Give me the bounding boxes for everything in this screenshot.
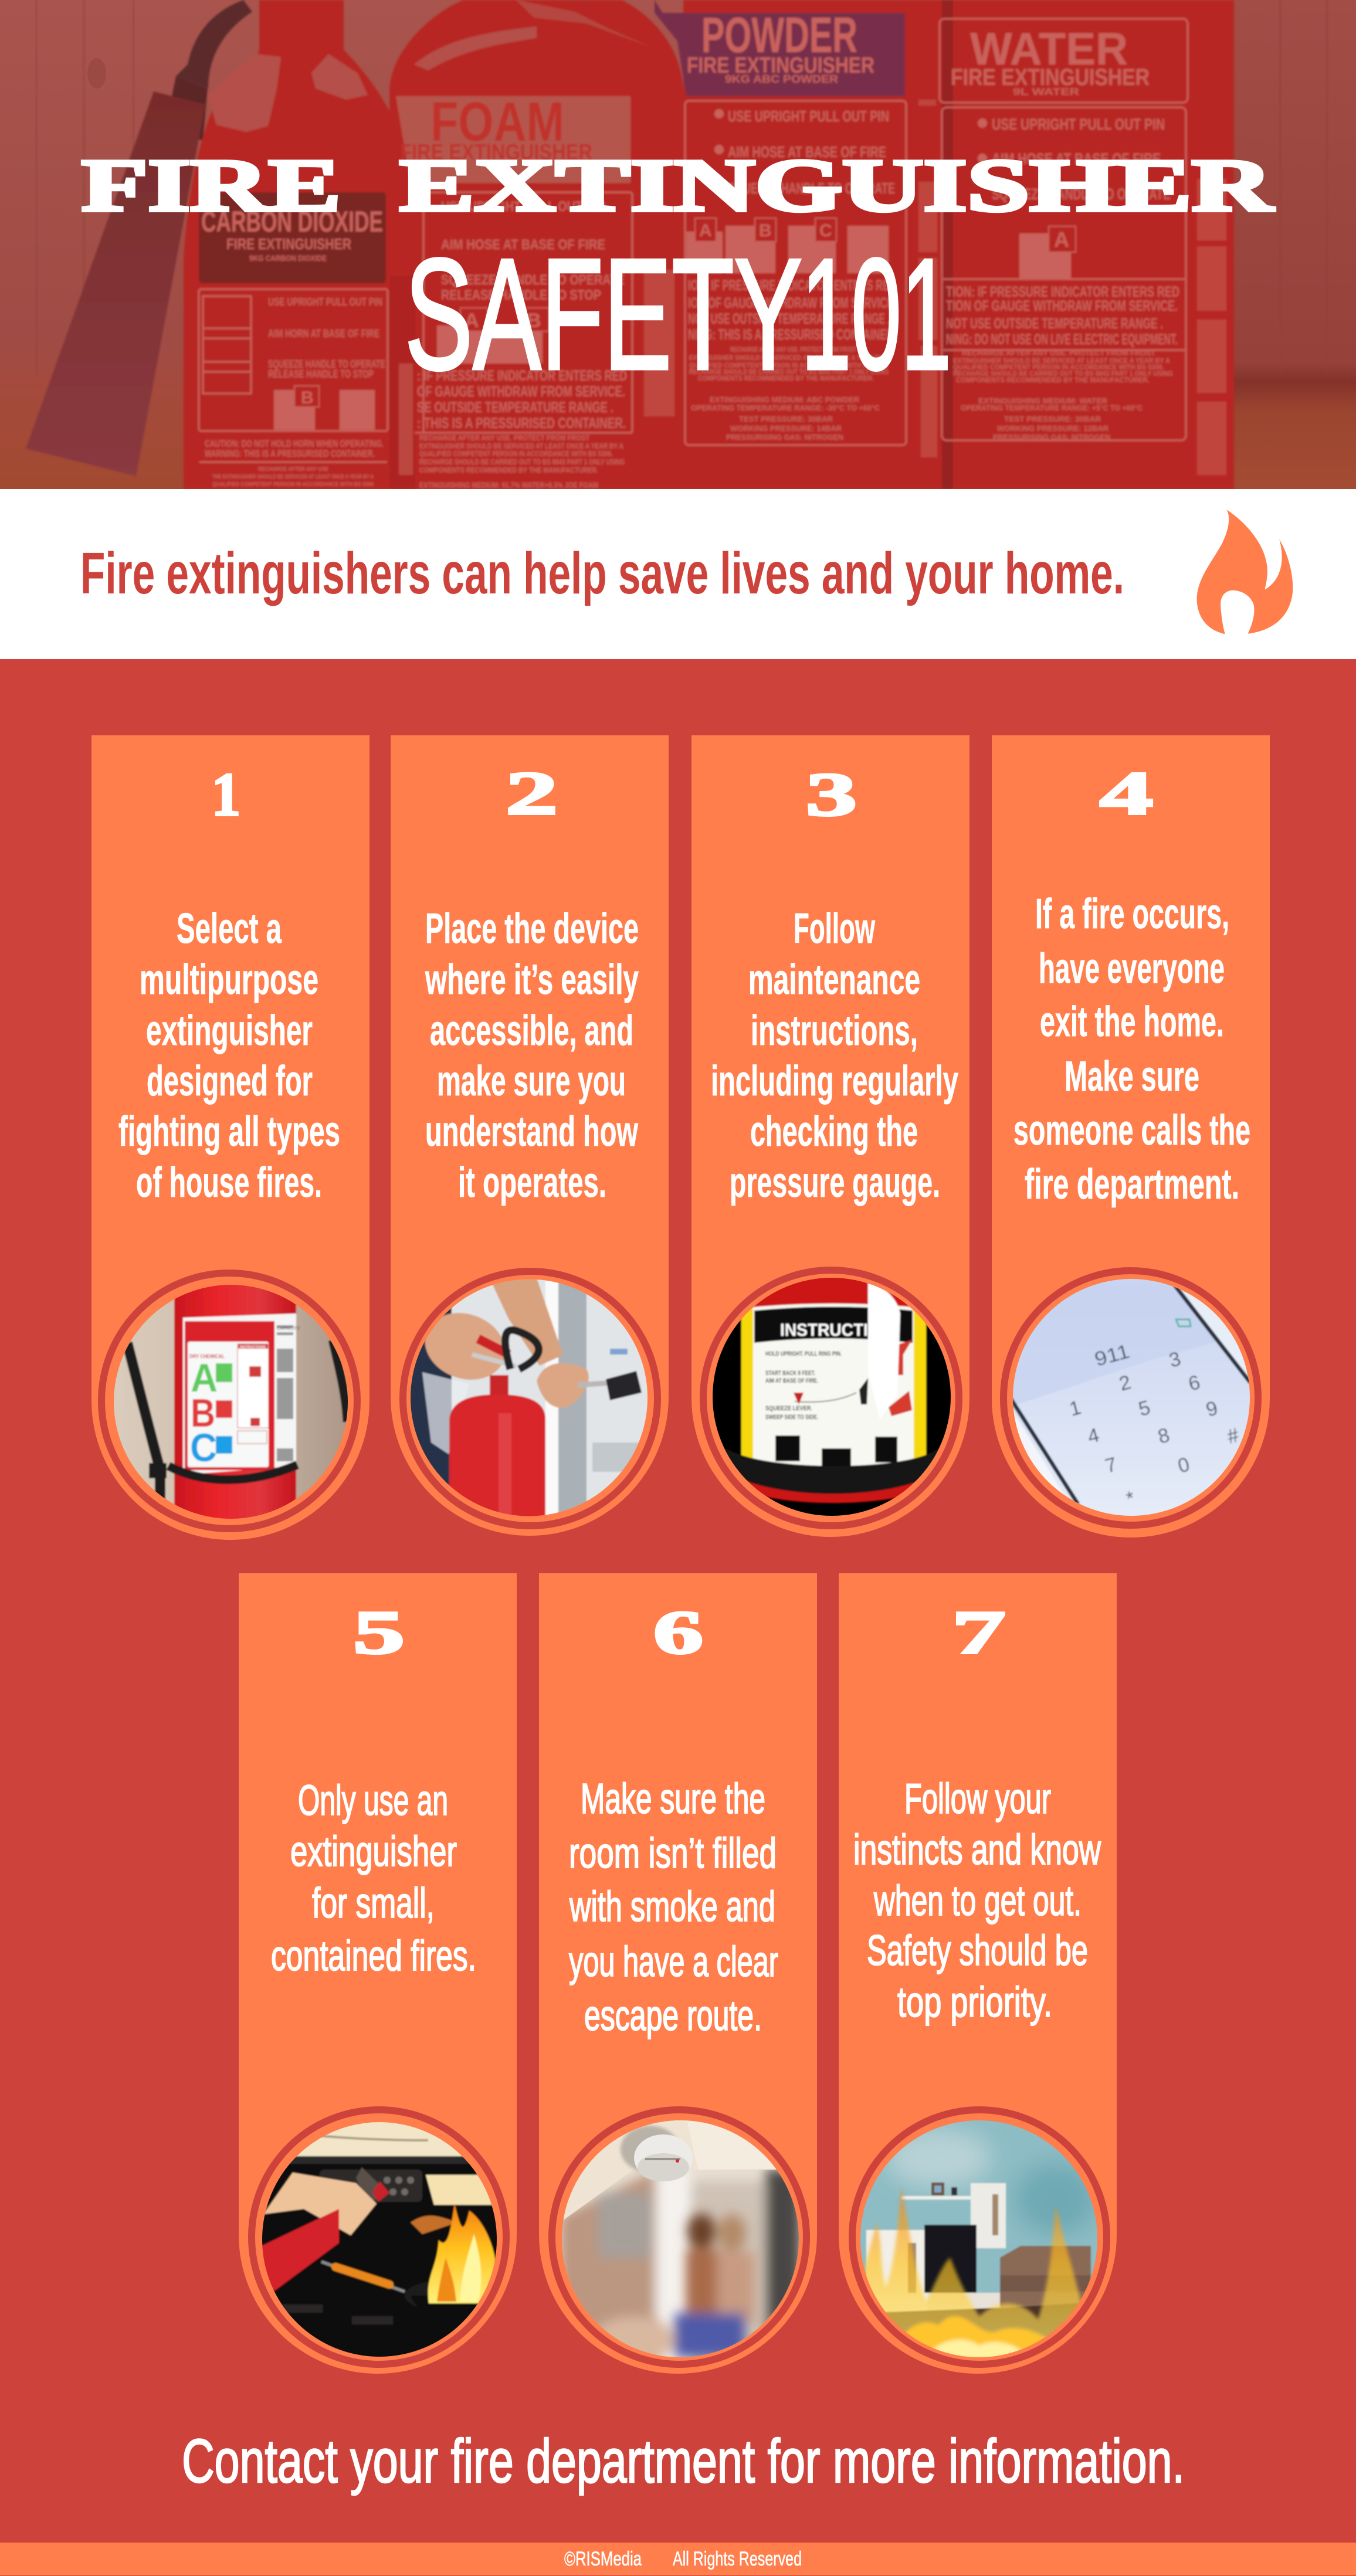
panel: step 3 [691,735,969,1537]
step number 5: 5 [353,1598,405,1667]
hero photo: fire extinguishers: QUALIFIED COMPETENT PERSON IN ACCORDANCE WITH BS 5306 [212,481,374,488]
hero photo: fire extinguishers: QUALIFIED COMPETENT PERSON IN ACCORDANCE WITH BS 5306. [689,361,889,369]
hero photo: fire extinguishers: PRESSURISING GAS: NITROGEN [726,433,843,442]
hero photo: fire extinguishers: FIRE EXTINGUISHER [226,235,351,253]
photo: smoke detector and smoky room [557,2117,804,2363]
hero photo: fire extinguishers: NOT USE OUTSIDE TEMPERATURE RANGE . [688,311,890,327]
panel: step 5 [239,1573,517,2374]
hero photo: fire extinguishers: COMPONENTS RECOMMENDED BY THE MANUFACTURER. [956,376,1150,384]
hero photo: fire extinguishers: OPERATING TEMPERATURE RANGE: -30°C TO +60°C [691,403,880,412]
step number 7: 7 [952,1598,1006,1667]
hero photo: fire extinguishers: WATER [970,23,1128,74]
water extinguisher [942,0,1234,489]
photo: extinguisher pressure label: SQUEEZE LEVER. [765,1405,812,1412]
panel: step 1 [91,735,369,1540]
step number 4: 4 [1100,759,1153,827]
hero photo: fire extinguishers: SQUEEZE HANDLE TO OPERATE [728,179,895,197]
step 7 text: Safety should be [867,1927,1088,1974]
hero photo: fire extinguishers: C [819,221,832,240]
hero photo: fire extinguishers: RECHARGE SHOULD BE CARRIED OUT TO BS 8843 PART 1 ONLY USING [689,368,889,376]
hero photo: fire extinguishers: USE UPRIGHT PULL OUT PIN [728,107,889,125]
hero photo: fire extinguishers: RECHARGE SHOULD BE CARRIED OUT TO BS 8843 PART 1 ONLY USING [953,369,1173,378]
step 3 text [711,905,958,1206]
step 3 text: maintenance [748,956,920,1003]
hero photo: fire extinguishers: A [699,221,712,240]
step 3 text: checking the [750,1108,918,1155]
photo: extinguisher on stove fire [262,2122,497,2357]
hero photo: fire extinguishers: SQUEEZE HANDLE TO OPERATE [992,185,1171,203]
photo: extinguisher pressure label: HOLD UPRIGHT. PULL RING PIN. [765,1350,842,1357]
hero photo: fire extinguishers: QUALIFIED COMPETENT PERSON IN ACCORDANCE WITH BS 5306. [419,449,613,458]
step 2 text: make sure you [437,1058,626,1105]
hero photo: fire extinguishers: AIM HOSE AT BASE OF FIRE [441,237,605,253]
photo: phone dialing 911: 3 [1167,1348,1183,1372]
hero photo: fire extinguishers: CAUTION: DO NOT HOLD HORN WHEN OPERATING. [205,438,384,449]
hero photo: fire extinguishers: AIM HORN AT BASE OF FIRE [268,328,379,340]
hero photo: fire extinguishers: THE EXTINGUISHER SHOULD BE SERVICED AT LEAST ONCE A YEAR BY A [212,474,374,480]
photo: phone dialing 911: * [1124,1487,1137,1511]
hero photo: fire extinguishers: NING: THIS IS A PRESSURISED CONTAINER. [688,327,896,343]
step 4 text: have everyone [1039,945,1225,992]
footer bar [0,2543,1356,2575]
hero photo: fire extinguishers: FOAM [430,91,564,153]
step 5 text: Only use an [298,1777,448,1824]
hero photo: fire extinguishers: SQUEEZE HANDLE TO OPERATE [268,358,385,370]
step 2 text: it operates. [458,1159,606,1206]
step 3 text: pressure gauge. [730,1159,940,1206]
hero photo: fire extinguishers: NING: DO NOT USE ON LIVE ELECTRIC EQUIPMENT. [946,331,1178,348]
step 3 text: Follow [794,905,876,952]
photo: phone dialing 911: 2 [1117,1371,1133,1396]
hero photo: fire extinguishers: EXTINGUISHER SHOULD BE SERVICED AT LEAST ONCE A YEAR BY A [419,442,623,450]
hero photo: fire extinguishers: NOT USE OUTSIDE TEMPERATURE RANGE . [946,315,1163,332]
hero photo: fire extinguishers: EXTINGUISHING MEDIUM: ABC POWDER [710,395,860,404]
hero photo: fire extinguishers: USE UPRIGHT PULL OUT PIN [992,116,1165,133]
photo: phone dialing 911 [1013,1279,1250,1516]
step 1 text: extinguisher [146,1007,313,1054]
hero photo: fire extinguishers: OF GAUGE WITHDRAW FROM SERVICE. [417,383,625,400]
title: fire extinguisher: EXTINGUISHER [399,144,1274,227]
step 6 text: you have a clear [569,1939,778,1986]
photo: extinguisher ABC label: DRY CHEMICAL [189,1353,225,1359]
photo: phone dialing 911: # [1225,1424,1241,1448]
hero photo: fire extinguishers: : IF PRESSURE INDICATOR ENTERS RED [417,368,627,384]
photo: phone dialing 911: 7 [1103,1453,1119,1478]
step number 6: 6 [653,1598,703,1667]
hero photo: fire extinguishers: COMPONENTS RECOMMENDED BY THE MANUFACTURER. [419,466,598,474]
hero photo: fire extinguishers: FIRE EXTINGUISHER [400,140,592,165]
step 1 text [118,905,340,1206]
step 2 text: Place the device [425,905,639,952]
photo: burning living room [856,2117,1103,2360]
step number 3: 3 [806,760,857,829]
hero photo: fire extinguishers: USE UPRIGHT PULL OUT PIN [441,199,605,215]
hero photo: fire extinguishers: USE UPRIGHT PULL OUT PIN [268,296,382,308]
photo: extinguisher ABC label: CAPACITY [277,1326,300,1331]
photo: extinguisher ABC label: C [190,1426,217,1470]
photo: extinguisher ABC label [114,1285,348,1519]
panel: step 2 [391,735,669,1536]
step 3 text: including regularly [711,1058,958,1105]
step 4 text: Make sure [1065,1053,1199,1100]
hero photo: fire extinguishers: AIM HOSE AT BASE OF FIRE [992,150,1161,168]
hero photo: fire extinguishers: : THIS IS A PRESSURISED CONTAINER. [417,415,626,432]
step 5 text: contained fires. [271,1933,476,1980]
step 1 text: fighting all types [118,1108,340,1155]
photo: phone dialing 911: 9 [1204,1397,1220,1421]
photo: extinguisher pressure label: SWEEP SIDE TO SIDE. [765,1414,818,1421]
step 7 text: instincts and know [853,1827,1101,1874]
hero photo: fire extinguishers: CARBON DIOXIDE [201,205,383,238]
powder extinguisher [683,0,942,489]
photo: extinguisher ABC label: B [191,1391,215,1435]
step 1 text: Select a [177,905,282,952]
title: fire extinguisher [82,144,1274,227]
photo: phone dialing 911: 1 [1067,1396,1083,1421]
hero photo: fire extinguishers: RECHARGE AFTER ANY USE [258,466,328,473]
hero photo: fire extinguishers: ION: IF PRESSURE INDICATOR ENTERS RED [688,277,896,294]
hero photo: fire extinguishers: RECHARGE SHOULD BE CARRIED OUT TO BS 8843 PART 1 ONLY USING [419,457,625,466]
hero photo: fire extinguishers: SQUEEZE HANDLE TO OPERATE [441,272,625,288]
step 4 text: If a fire occurs, [1035,891,1229,938]
step 4 text: exit the home. [1040,999,1224,1046]
hero photo: fire extinguishers: 9L WATER [1013,86,1079,97]
hero photo: fire extinguishers: B [301,388,314,408]
hero photo: fire extinguishers: 9KG ABC POWDER [725,73,838,85]
step 1 text: multipurpose [140,956,318,1003]
hero photo: fire extinguishers: A [465,310,479,332]
photo: extinguisher ABC label: INSTRUCTIONS [240,1346,266,1349]
photo: hands operating extinguisher [411,1279,648,1516]
step 5 text: for small, [312,1880,435,1927]
photo: extinguisher pressure label: AIM AT BASE OF FIRE. [765,1377,818,1384]
step 2 text: where it’s easily [425,956,639,1003]
step 4 text [1013,891,1250,1208]
hero photo: fire extinguishers: QUALIFIED COMPETENT PERSON IN ACCORDANCE WITH BS 5306. [953,363,1164,371]
photo: extinguisher ABC label: A [191,1356,218,1400]
hero photo: fire extinguishers: OPERATING TEMPERATURE RANGE: +5°C TO +60°C [961,403,1143,412]
hero photo: fire extinguishers: FIRE EXTINGUISHER [951,65,1150,90]
hero photo: fire extinguishers [0,0,1356,490]
hero photo: fire extinguishers: WORKING PRESSURE: 12BAR [997,424,1109,433]
title: safety 101: 101 [801,226,951,403]
hero photo: fire extinguishers: ION OF GAUGE WITHDRAW FROM SERVICE. [688,295,896,311]
photo: extinguisher pressure label: INSTRUCTI [780,1321,868,1340]
hero photo: fire extinguishers: A [1054,228,1069,252]
photo: phone dialing 911: 911 [1092,1340,1132,1371]
hero photo: fire extinguishers: RELEASE HANDLE TO STOP [268,368,374,380]
hero photo: fire extinguishers: RECHARGE AFTER ANY USE. PROTECT FROM FROST [730,345,856,354]
step 2 text: understand how [425,1108,639,1155]
step 2 text [425,905,639,1206]
step 1 text: designed for [147,1058,313,1105]
panel: step 7 [839,1573,1117,2374]
hero photo: fire extinguishers: TION OF GAUGE WITHDRAW FROM SERVICE. [946,298,1178,314]
panel: step 4 [992,735,1270,1538]
hero photo: fire extinguishers: WORKING PRESSURE: 14BAR [730,424,842,433]
co2 extinguisher horn [176,0,252,88]
hero photo: fire extinguishers: EXTINGUISHER SHOULD BE SERVICED AT LEAST ONCE A YEAR BY A [953,357,1170,365]
hero photo: fire extinguishers: TEST PRESSURE: 30BAR [1004,415,1101,423]
hero photo: fire extinguishers: COMPONENTS RECOMMENDED BY THE MANUFACTURER. [698,374,874,382]
hero photo: fire extinguishers: SE OUTSIDE TEMPERATURE RANGE . [417,399,613,416]
hero photo: fire extinguishers: WARNING: THIS IS A PRESSURISED CONTAINER. [205,448,375,459]
step 2 text: accessible, and [430,1007,633,1054]
step 7 text: Follow your [904,1776,1051,1822]
hero photo: fire extinguishers: B [527,310,541,332]
hero photo: fire extinguishers: RELEASE HANDLE TO STOP [441,287,601,303]
photo: phone dialing 911: 8 [1155,1424,1172,1448]
photo: phone dialing 911: 0 [1175,1453,1192,1478]
step 6 text: Make sure the [581,1776,765,1822]
panel: tagline band [0,489,1356,659]
panel: step 6 [539,1573,817,2374]
hero photo: fire extinguishers: EXTINGUISHING MEDIUM: WATER [978,396,1108,405]
rights notice: All Rights Reserved [673,2548,802,2570]
step 7 text: top priority. [897,1979,1052,2026]
copyright: ©RISMedia [564,2548,642,2570]
hero photo: fire extinguishers: AIM HOSE AT BASE OF FIRE [728,143,886,161]
hero photo: fire extinguishers: EXTINGUISHING MEDIUM: 91.7% WATER+8.3% JOE FOAM [419,480,598,490]
photo: phone dialing 911: 6 [1186,1371,1202,1396]
hero photo: fire extinguishers: TION: IF PRESSURE INDICATOR ENTERS RED [946,284,1179,300]
photo: phone dialing 911: 5 [1136,1396,1152,1421]
hero photo: fire extinguishers: TEST PRESSURE: 30BAR [739,415,833,423]
foam extinguisher [389,0,683,489]
step 7 text [853,1776,1101,2026]
step 5 text [271,1777,476,1980]
icon: flame [1197,510,1293,634]
hero photo: fire extinguishers: RECHARGE AFTER ANY USE. PROTECT FROM FROST [962,349,1156,357]
photo: extinguisher pressure label: START BACK 8 FEET. [765,1370,815,1377]
hero photo: fire extinguishers: RECHARGE AFTER ANY USE. PROTECT FROM FROST [419,433,589,442]
step 4 text: fire department. [1025,1161,1239,1208]
step 3 text: instructions, [751,1007,918,1054]
step 6 text: escape route. [584,1993,762,2039]
photo: extinguisher pressure label [707,1272,956,1522]
hero photo: fire extinguishers: 9KG CARBON DIOXIDE [249,253,327,263]
hero photo: fire extinguishers: FIRE EXTINGUISHER [687,53,874,78]
hero photo: fire extinguishers: PRESSURISING GAS: NITROGEN [993,433,1110,442]
step number 1: 1 [212,760,240,829]
step 6 text: with smoke and [569,1883,775,1930]
step 6 text [569,1776,778,2039]
step 7 text: when to get out. [873,1878,1082,1925]
step number 2: 2 [506,759,558,827]
step 6 text: room isn’t filled [569,1830,777,1877]
title: fire extinguisher: FIRE [82,144,341,227]
hero photo: fire extinguishers: B [759,221,772,240]
step 1 text: of house fires. [136,1159,322,1206]
co2 body [182,0,391,489]
hero photo: fire extinguishers: EXTINGUISHER SHOULD BE SERVICED AT LEAST ONCE A YEAR BY A [689,354,889,362]
title: safety 101: SAFETY [405,226,802,403]
photo: phone dialing 911: 4 [1085,1424,1101,1448]
step 5 text: extinguisher [290,1828,457,1875]
hero photo: fire extinguishers: POWDER [701,8,857,63]
